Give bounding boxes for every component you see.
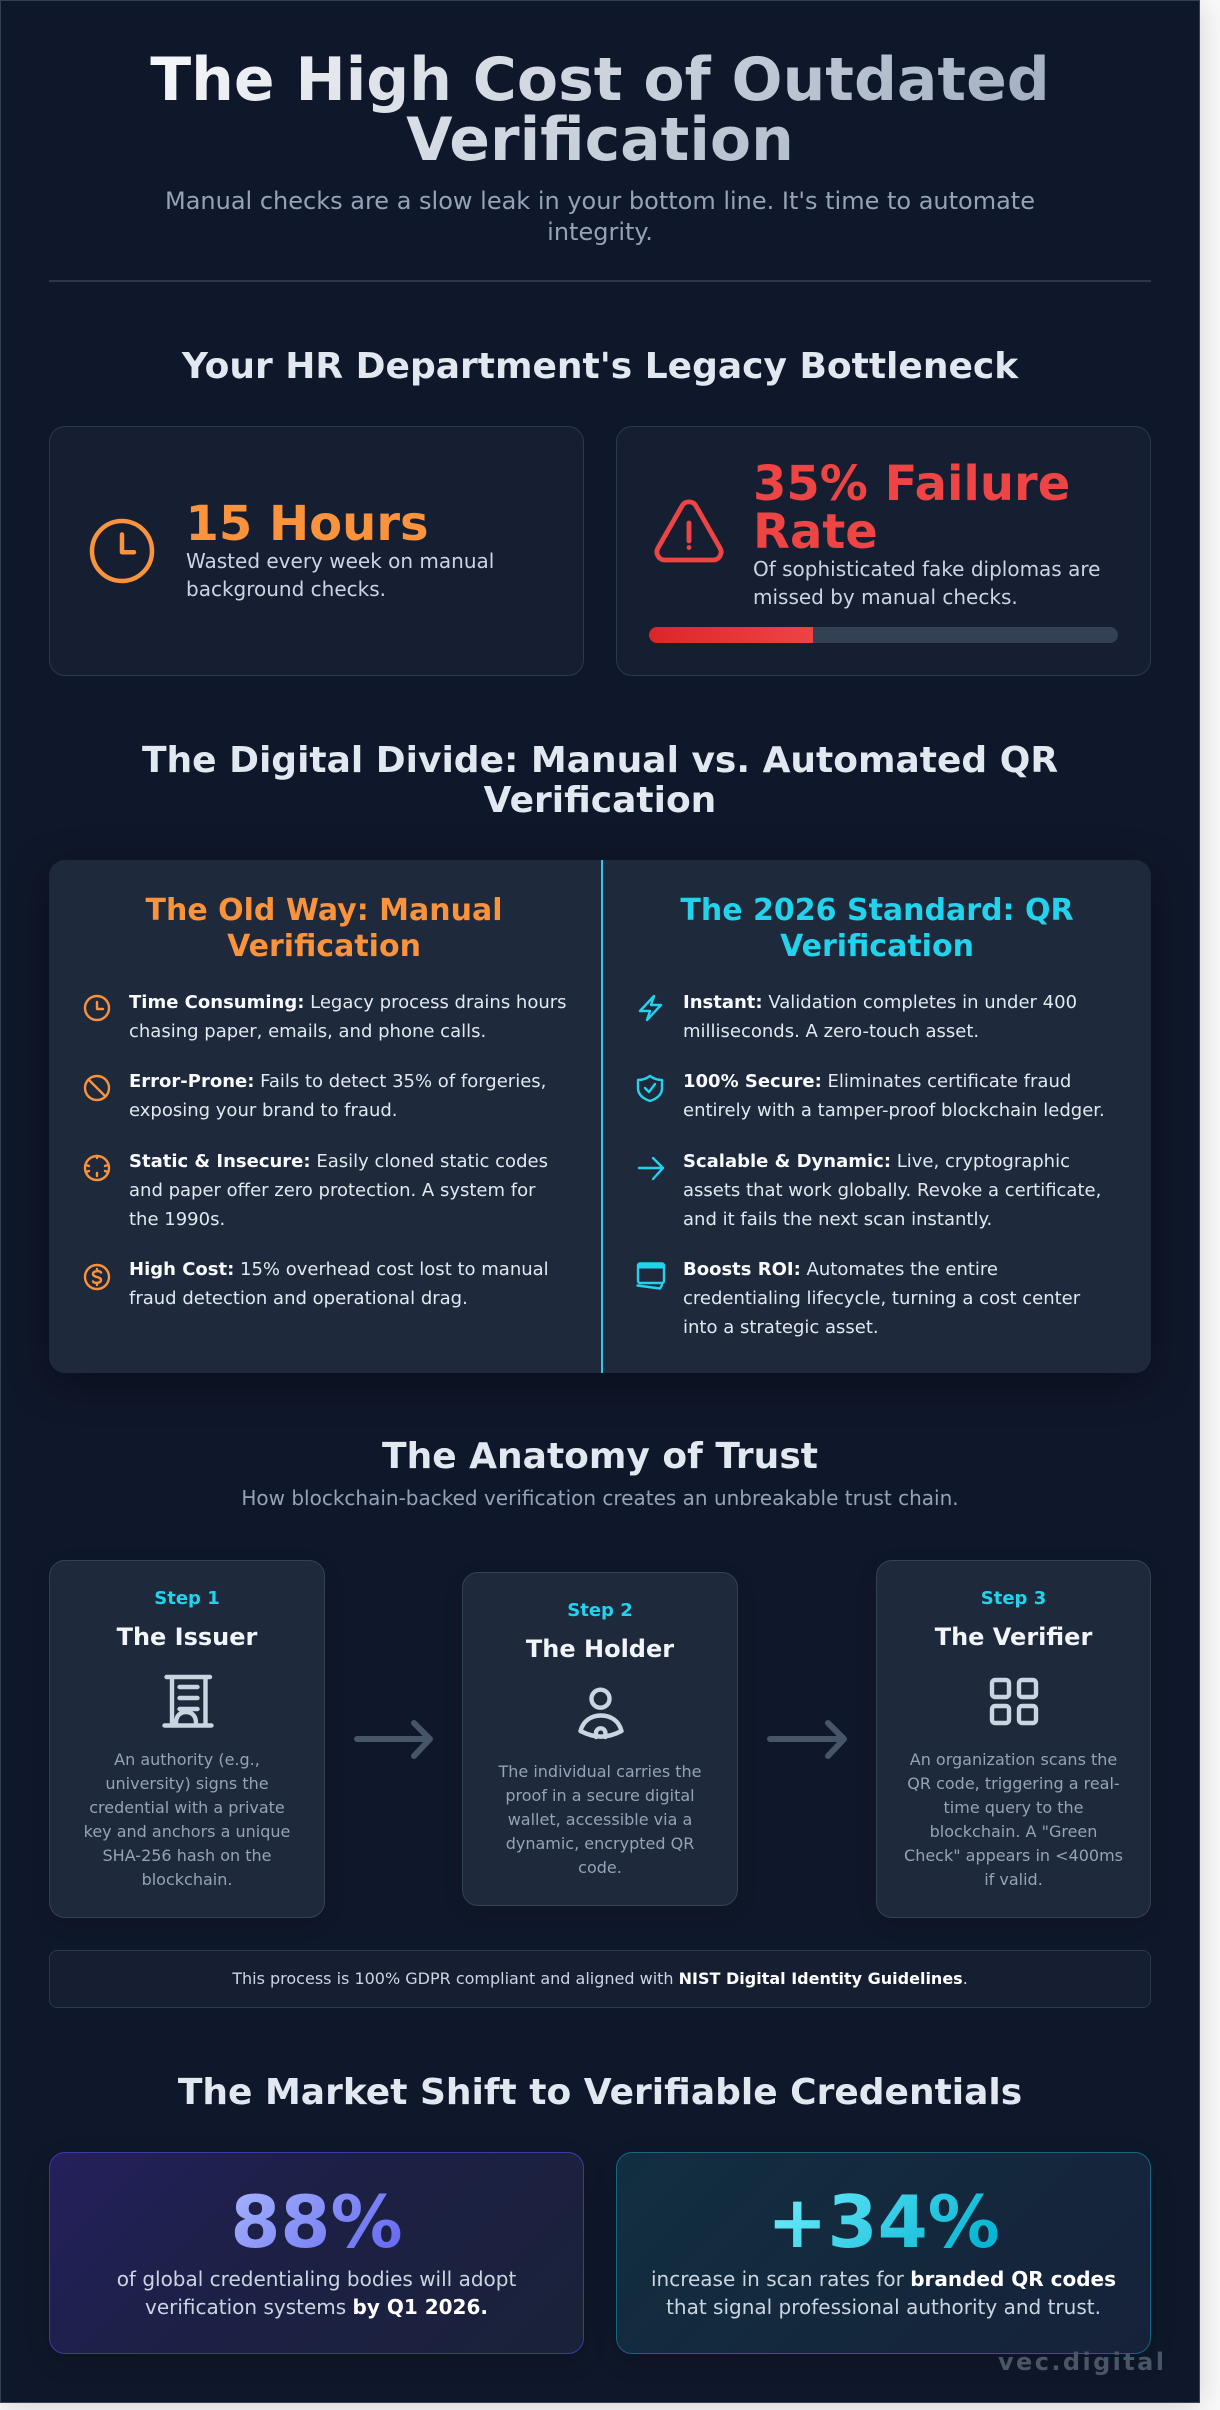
step description: time query to the [944, 1798, 1083, 1817]
list item: high cost [129, 1259, 549, 1309]
list item: time consuming: Time Consuming: Legacy process drains hours [129, 992, 567, 1013]
step description: The individual carries the [498, 1762, 702, 1781]
list item: secure: 100% Secure: Eliminates certificate fraud [683, 1071, 1071, 1092]
step description: code. [578, 1858, 622, 1877]
stat description: missed by manual checks. [753, 585, 1018, 609]
step description: An authority (e.g., [114, 1750, 260, 1769]
list item: ROI [683, 1259, 1080, 1338]
icon: credential card [636, 1262, 666, 1290]
column heading: old way: Verification [227, 929, 421, 964]
icon: lightning bolt [638, 994, 662, 1022]
column heading: old way [146, 893, 502, 964]
heading: market shift: The Market Shift to Verifiable Credentials [178, 2072, 1022, 2112]
panel: comparison [49, 860, 1151, 1380]
stat value: 15 Hours [186, 496, 429, 552]
watermark: vec.digital [998, 2348, 1166, 2376]
list item: error prone [129, 1071, 546, 1121]
list item: ROI: credentialing lifecycle, turning a cost center [683, 1288, 1080, 1309]
stat value [50, 2186, 583, 2258]
icon: shield check [636, 1074, 664, 1102]
icon: dollar [84, 1264, 110, 1290]
subtitle: integrity. [547, 218, 653, 246]
step label: Step 2 [567, 1600, 633, 1621]
panel: step 2 holder [462, 1572, 738, 1906]
panel: old way column [84, 893, 567, 1309]
stat description [117, 2267, 516, 2319]
panel: 15 hours stat [49, 426, 584, 676]
icon: QR grid [990, 1678, 1038, 1726]
arrow: step 1 to step 2 [354, 1720, 433, 1759]
title: The High Cost of Outdated [150, 45, 1050, 115]
list item: secure: entirely with a tamper-proof blockchain ledger. [683, 1100, 1105, 1121]
column heading: old way: The Old Way: Manual [146, 893, 502, 928]
stat value: Rate [753, 504, 878, 560]
step description: blockchain. [142, 1870, 232, 1889]
callout: compliance note [49, 1950, 1151, 2008]
stat value: +34% [767, 2180, 1000, 2264]
list item: error prone: Error-Prone: Fails to detect 35% of forgeries, [129, 1071, 546, 1092]
list item: static and insecure [129, 1151, 548, 1230]
title [49, 50, 1151, 170]
stat value: 88% [230, 2180, 403, 2264]
heading: digital divide: The Digital Divide: Manual vs. Automated QR [142, 740, 1058, 781]
panel: +34% stat [616, 2152, 1151, 2354]
step title: The Issuer [117, 1623, 257, 1651]
stat value: 35% Failure [753, 456, 1070, 512]
step description: credential with a private [89, 1798, 285, 1817]
subtitle [165, 187, 1035, 246]
list item: scalable: and it fails the next scan instantly. [683, 1209, 992, 1230]
panel: QR standard column [636, 893, 1105, 1338]
list item: time consuming: chasing paper, emails, and phone calls. [129, 1021, 486, 1042]
icon: static target [84, 1154, 110, 1182]
list item: static and insecure: and paper offer zero protection. A system for [129, 1180, 536, 1201]
icon: clock [90, 518, 154, 584]
list item: instant: milliseconds. A zero-touch asset. [683, 1021, 979, 1042]
column heading: 2026 standard: Verification [780, 929, 974, 964]
callout: compliance note: This process is 100% GDPR compliant and aligned with NIST Digital Identity Guidelines. [232, 1969, 968, 1988]
list item: static and insecure: the 1990s. [129, 1209, 225, 1230]
step description: proof in a secure digital [505, 1786, 695, 1805]
section subtitle: How blockchain-backed verification creates an unbreakable trust chain. [241, 1486, 959, 1510]
stat description: increase in scan rates for branded QR codes [651, 2267, 1116, 2291]
step description [498, 1762, 702, 1877]
list item: instant: Instant: Validation completes in under 400 [683, 992, 1077, 1013]
list item: ROI: Boosts ROI: Automates the entire [683, 1259, 998, 1280]
stat value [753, 456, 1070, 560]
column heading: 2026 standard: The 2026 Standard: QR [680, 893, 1074, 928]
stat description: verification systems by Q1 2026. [145, 2295, 488, 2319]
stat description [186, 549, 494, 601]
step description: wallet, accessible via a [508, 1810, 692, 1829]
step label: Step 1 [154, 1588, 220, 1609]
list item: ROI: into a strategic asset. [683, 1317, 879, 1338]
stat description [753, 557, 1100, 609]
list item: instant [683, 992, 1077, 1042]
subtitle: Manual checks are a slow leak in your bottom line. It's time to automate [165, 187, 1035, 215]
list item: high cost: High Cost: 15% overhead cost lost to manual [129, 1259, 549, 1280]
stat description: that signal professional authority and trust. [666, 2295, 1101, 2319]
list item: static and insecure: Static & Insecure: Easily cloned static codes [129, 1151, 548, 1172]
step label: Step 3 [981, 1588, 1046, 1609]
icon: ban [84, 1074, 110, 1102]
icon: arrow right [638, 1156, 664, 1180]
list item: time consuming [129, 992, 567, 1042]
icon: clock small [84, 994, 110, 1022]
stat value [617, 2186, 1150, 2258]
heading: anatomy of trust: The Anatomy of Trust [382, 1436, 818, 1476]
panel: step 1 issuer [49, 1560, 325, 1918]
stat description: of global credentialing bodies will adopt [117, 2267, 516, 2291]
step description: blockchain. A "Green [930, 1822, 1097, 1841]
icon: warning triangle [654, 500, 724, 562]
step description: dynamic, encrypted QR [506, 1834, 694, 1853]
icon: building [162, 1674, 214, 1728]
heading: digital divide: Verification [484, 780, 716, 821]
icon: person with wallet [578, 1688, 624, 1740]
list item: high cost: fraud detection and operational drag. [129, 1288, 468, 1309]
step description [84, 1750, 290, 1889]
list item: scalable: Scalable & Dynamic: Live, cryptographic [683, 1151, 1070, 1172]
step title: The Holder [526, 1635, 674, 1663]
stat description: Of sophisticated fake diplomas are [753, 557, 1100, 581]
step title: The Verifier [935, 1623, 1092, 1651]
step description: if valid. [984, 1870, 1043, 1889]
step description: Check" appears in <400ms [904, 1846, 1123, 1865]
stat description [651, 2267, 1116, 2319]
title: Verification [406, 105, 794, 175]
panel: 35% failure rate stat [616, 426, 1151, 676]
step description: An organization scans the [910, 1750, 1117, 1769]
step description: university) signs the [105, 1774, 269, 1793]
step description: QR code, triggering a real- [907, 1774, 1120, 1793]
heading: digital divide [142, 740, 1058, 821]
list item: scalable: assets that work globally. Revoke a certificate, [683, 1180, 1101, 1201]
list item: secure [683, 1071, 1105, 1121]
arrow: step 2 to step 3 [767, 1720, 847, 1759]
column heading: 2026 standard [680, 893, 1074, 964]
step description [904, 1750, 1123, 1889]
step description: key and anchors a unique [84, 1822, 290, 1841]
heading: legacy bottleneck: Your HR Department's Legacy Bottleneck [182, 346, 1018, 386]
list item: scalable [683, 1151, 1101, 1230]
panel: step 3 verifier [876, 1560, 1151, 1918]
stat description: background checks. [186, 577, 386, 601]
progress bar 35% [649, 627, 1118, 643]
stat description: Wasted every week on manual [186, 549, 494, 573]
step description: SHA-256 hash on the [103, 1846, 271, 1865]
list item: error prone: exposing your brand to fraud. [129, 1100, 398, 1121]
panel: 88% stat [49, 2152, 584, 2354]
